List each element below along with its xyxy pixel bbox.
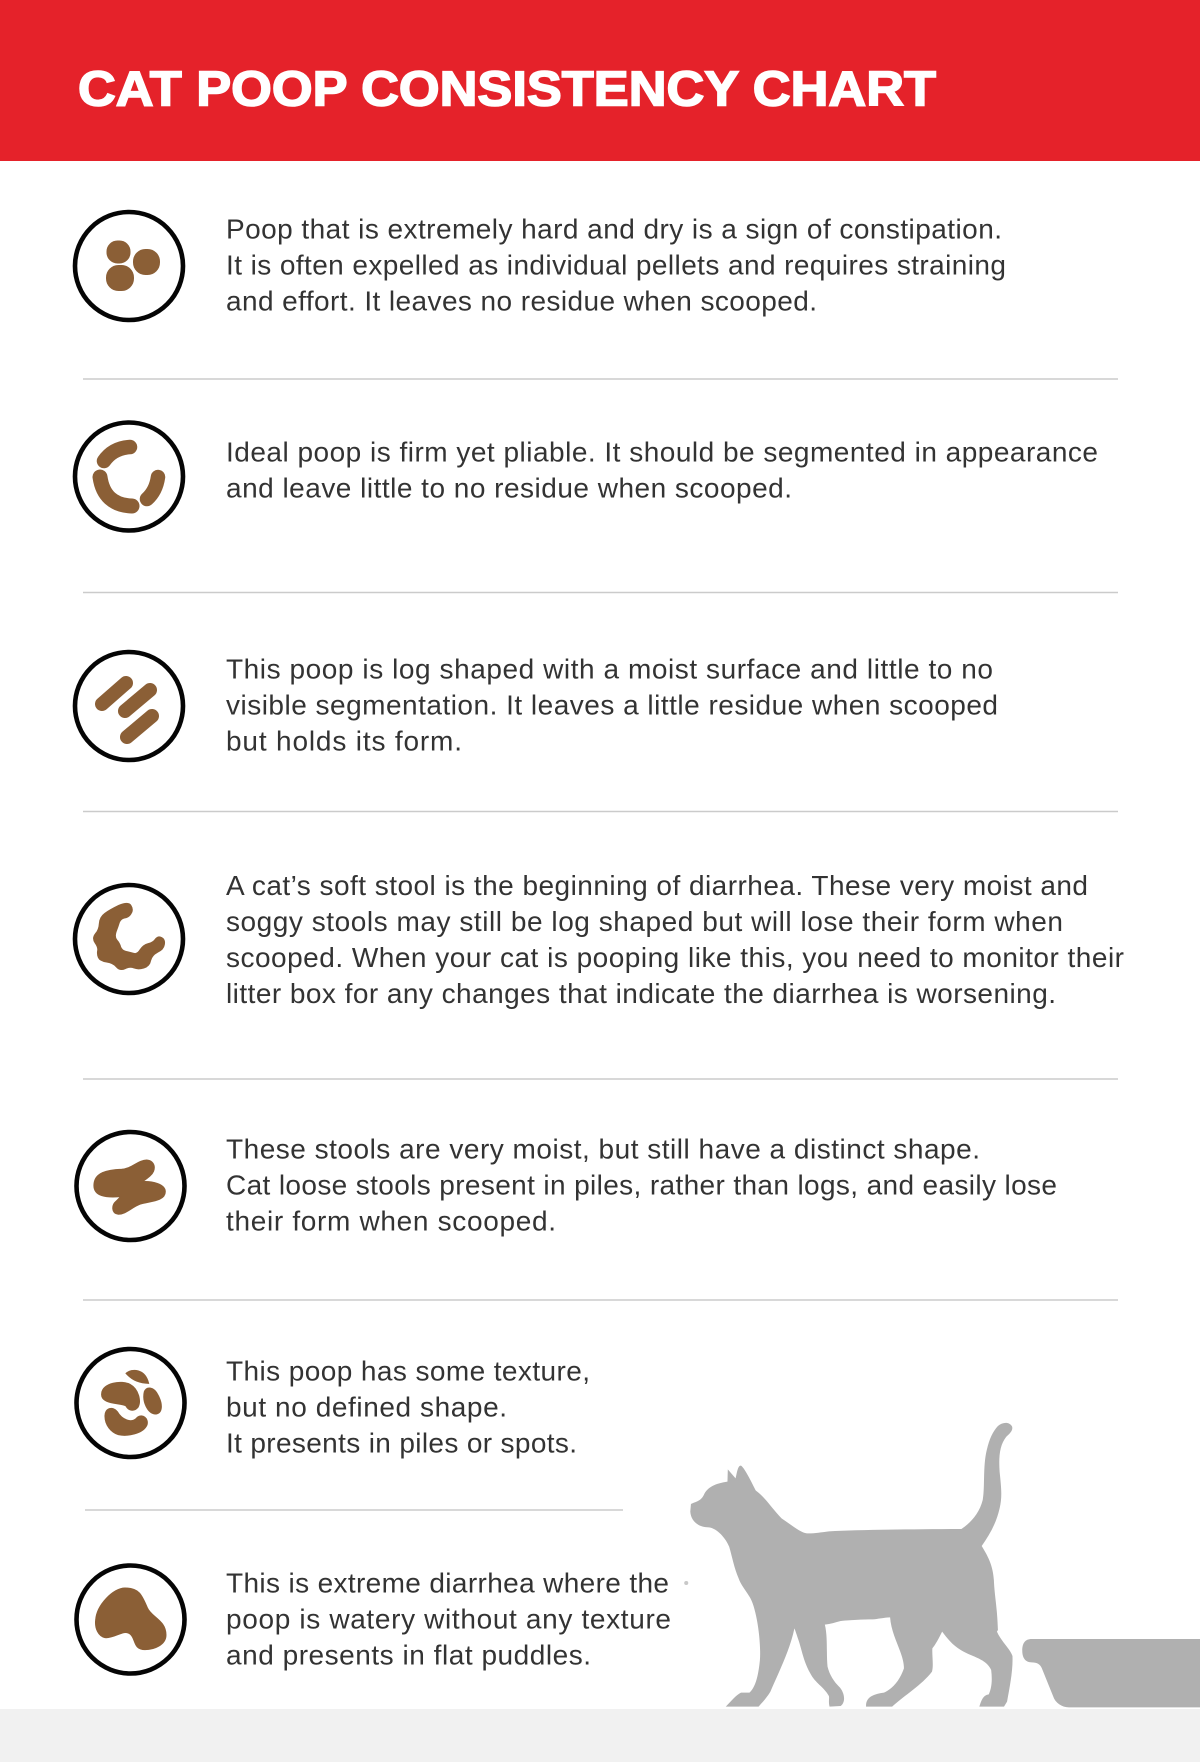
- footer band: [0, 1709, 1200, 1762]
- text: constipation description: and effort. It leaves no residue when scooped.: [226, 286, 817, 316]
- panel: hard pellets: [75, 212, 1006, 320]
- cat silhouette: [690, 1423, 1013, 1707]
- panel: log shaped: [75, 652, 998, 760]
- text: ideal description: and leave little to no residue when scooped.: [226, 472, 792, 504]
- text: soft stool description: litter box for any changes that indicate the diarrhea is worsening.: [226, 978, 1056, 1009]
- text: loose stool description: Cat loose stools present in piles, rather than logs, and easily lose: [226, 1170, 1057, 1200]
- text: soft stool description: soggy stools may still be log shaped but will lose their form when: [226, 906, 1063, 937]
- icon: soft stool: [75, 885, 183, 993]
- text: soft stool description: scooped. When your cat is pooping like this, you need to monitor their: [226, 942, 1124, 973]
- icon: mushy spots: [76, 1349, 184, 1457]
- text: log shaped description: visible segmentation. It leaves a little residue when scooped: [226, 690, 998, 720]
- icon: segmented arcs: [75, 422, 183, 530]
- panel: no defined shape: [76, 1349, 590, 1458]
- small dot: [684, 1581, 688, 1585]
- icon: loose stool: [76, 1132, 184, 1240]
- text: soft stool description: A cat’s soft stool is the beginning of diarrhea. These very moist and: [226, 870, 1088, 901]
- text: no defined shape description: It presents in piles or spots.: [226, 1428, 577, 1458]
- panel: watery diarrhea: [76, 1566, 671, 1674]
- text: watery description: This is extreme diarrhea where the: [226, 1568, 669, 1598]
- text: log shaped description: This poop is log shaped with a moist surface and little to no: [226, 654, 993, 684]
- text: ideal description: Ideal poop is firm yet pliable. It should be segmented in appearance: [226, 436, 1098, 468]
- text: constipation description: Poop that is extremely hard and dry is a sign of constipation.: [226, 214, 1002, 244]
- icon: flat puddle: [76, 1566, 184, 1674]
- text: log shaped description: but holds its form.: [226, 726, 462, 756]
- panel: soft stool: [75, 870, 1124, 1009]
- text: no defined shape description: but no defined shape.: [226, 1392, 507, 1422]
- title: CAT POOP CONSISTENCY CHART: [78, 62, 936, 116]
- text: loose stool description: [226, 1134, 1057, 1236]
- text: no defined shape description: [226, 1356, 590, 1458]
- text: ideal description: [226, 436, 1098, 504]
- header banner: [0, 0, 1200, 161]
- text: watery description: and presents in flat puddles.: [226, 1640, 591, 1670]
- text: no defined shape description: This poop has some texture,: [226, 1356, 590, 1386]
- icon: pellets: [75, 212, 183, 320]
- text: constipation description: [226, 214, 1006, 316]
- text: log shaped description: [226, 654, 998, 756]
- panel: loose stool: [76, 1132, 1057, 1240]
- text: loose stool description: their form when scooped.: [226, 1206, 556, 1236]
- text: watery description: [226, 1568, 671, 1670]
- litter box: [1022, 1639, 1200, 1707]
- text: loose stool description: These stools are very moist, but still have a distinct shape.: [226, 1134, 980, 1164]
- icon: three logs: [75, 652, 183, 760]
- text: soft stool description: [226, 870, 1124, 1009]
- text: watery description: poop is watery without any texture: [226, 1604, 671, 1634]
- illustration: cat walking to litter box: [684, 1423, 1200, 1707]
- text: constipation description: It is often expelled as individual pellets and requires straining: [226, 250, 1006, 280]
- panel: ideal poop: [75, 422, 1098, 530]
